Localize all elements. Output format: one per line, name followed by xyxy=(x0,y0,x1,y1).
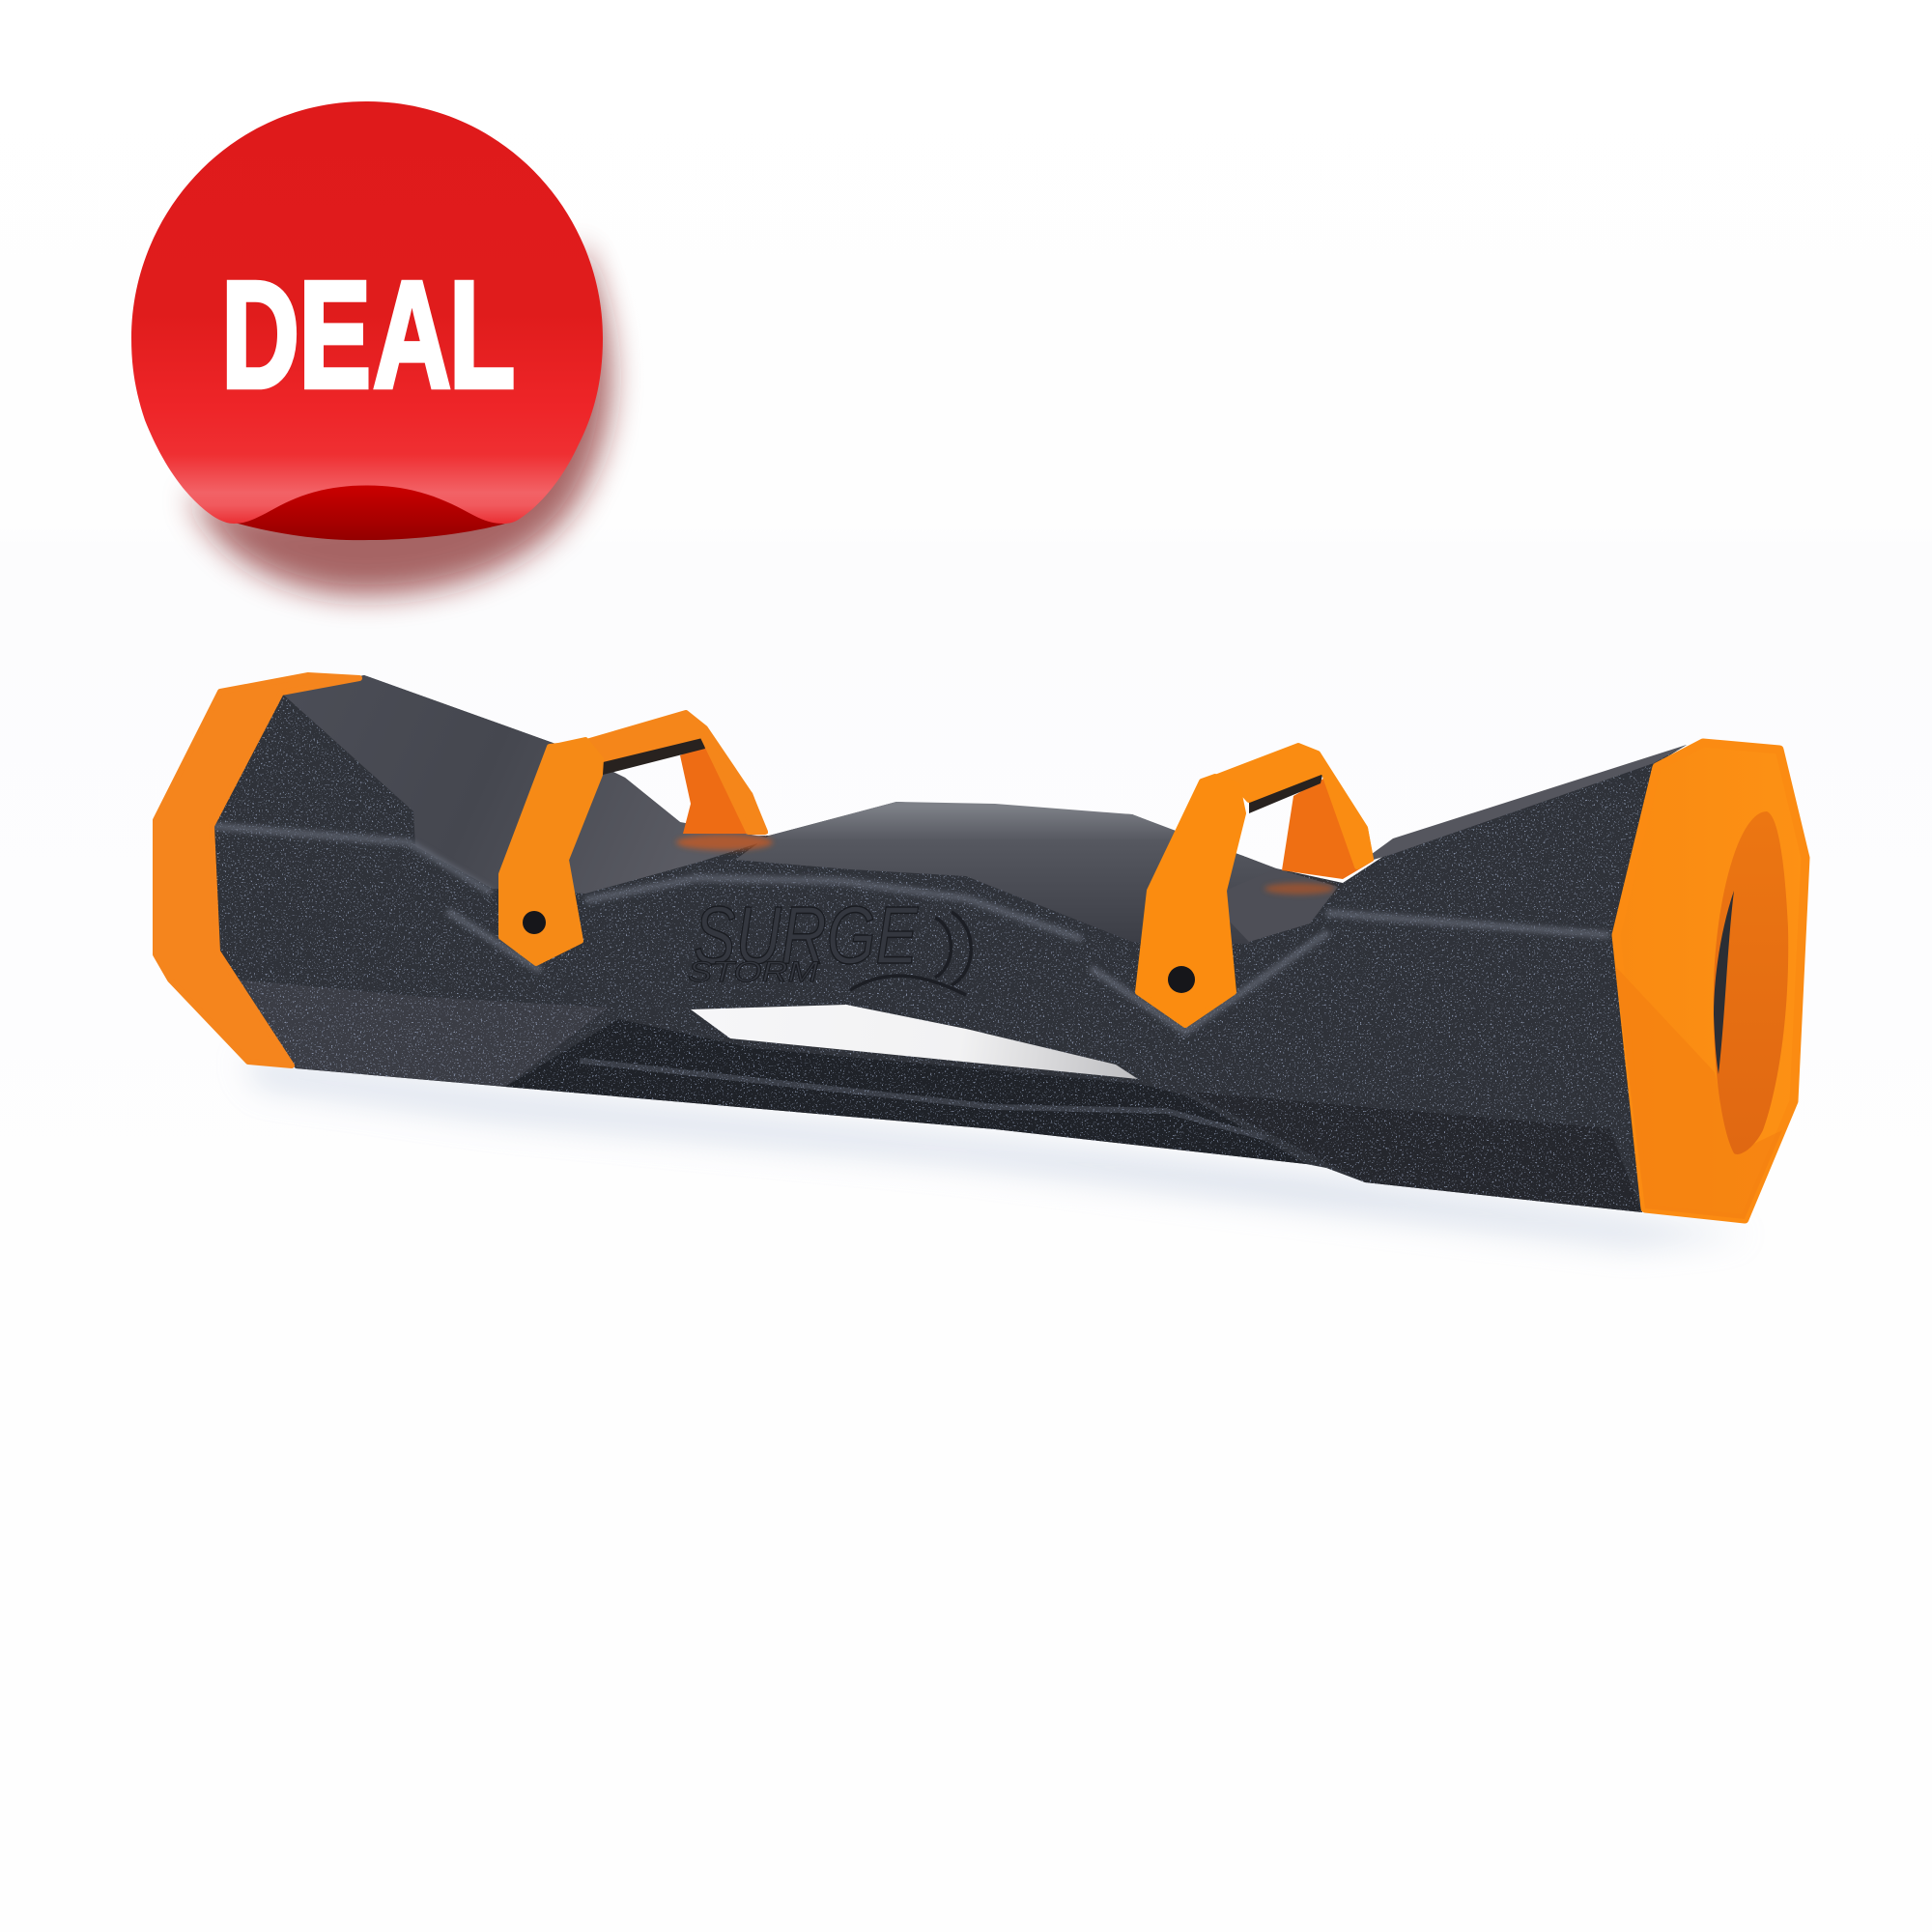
handle foot reflections xyxy=(676,835,1334,895)
bar groove xyxy=(580,1061,1265,1138)
DEAL label: DEAL xyxy=(221,250,515,419)
bottom left facet xyxy=(217,978,609,1087)
right handle xyxy=(1138,746,1374,1025)
bottom right facet xyxy=(1188,1092,1642,1212)
left end cap xyxy=(156,675,359,1065)
logo STORM: STORM xyxy=(688,956,818,988)
right far facet xyxy=(1357,745,1687,865)
logo waves xyxy=(850,912,971,995)
infographic: deal sticker and product photo xyxy=(131,101,1810,1258)
front leg xyxy=(501,740,601,963)
middle top facet xyxy=(735,802,1276,944)
left handle xyxy=(501,713,768,963)
top bar xyxy=(1208,746,1371,867)
cap opening xyxy=(1714,811,1788,1154)
product logo xyxy=(688,890,971,995)
cap lower shade xyxy=(1615,966,1782,1219)
body silhouette xyxy=(212,675,1687,1212)
bolt xyxy=(1168,966,1195,993)
logo SURGE: SURGE xyxy=(694,890,919,980)
far leg xyxy=(680,744,768,834)
right dip xyxy=(1208,868,1338,942)
front leg xyxy=(1138,777,1243,1025)
product: Surge Storm bag xyxy=(156,667,1805,1227)
grip band xyxy=(603,735,705,775)
window under body xyxy=(691,1005,1138,1079)
opening dark interior xyxy=(1714,891,1734,1074)
product shadow xyxy=(242,1058,1748,1246)
grip band xyxy=(1249,771,1323,813)
cap outer ring xyxy=(1616,743,1805,1219)
left top facet xyxy=(281,675,773,894)
sticker underside flap xyxy=(224,481,512,540)
top bar xyxy=(570,713,765,832)
far leg xyxy=(1282,779,1374,879)
lower base bar xyxy=(505,1019,1306,1164)
sticker disc xyxy=(131,101,603,524)
speckle texture xyxy=(193,667,1700,1227)
front face ridges xyxy=(212,826,1609,1032)
sticker shadow xyxy=(188,242,611,595)
right end cap xyxy=(1615,743,1805,1219)
bolt xyxy=(523,911,546,934)
deal sticker xyxy=(131,101,611,595)
